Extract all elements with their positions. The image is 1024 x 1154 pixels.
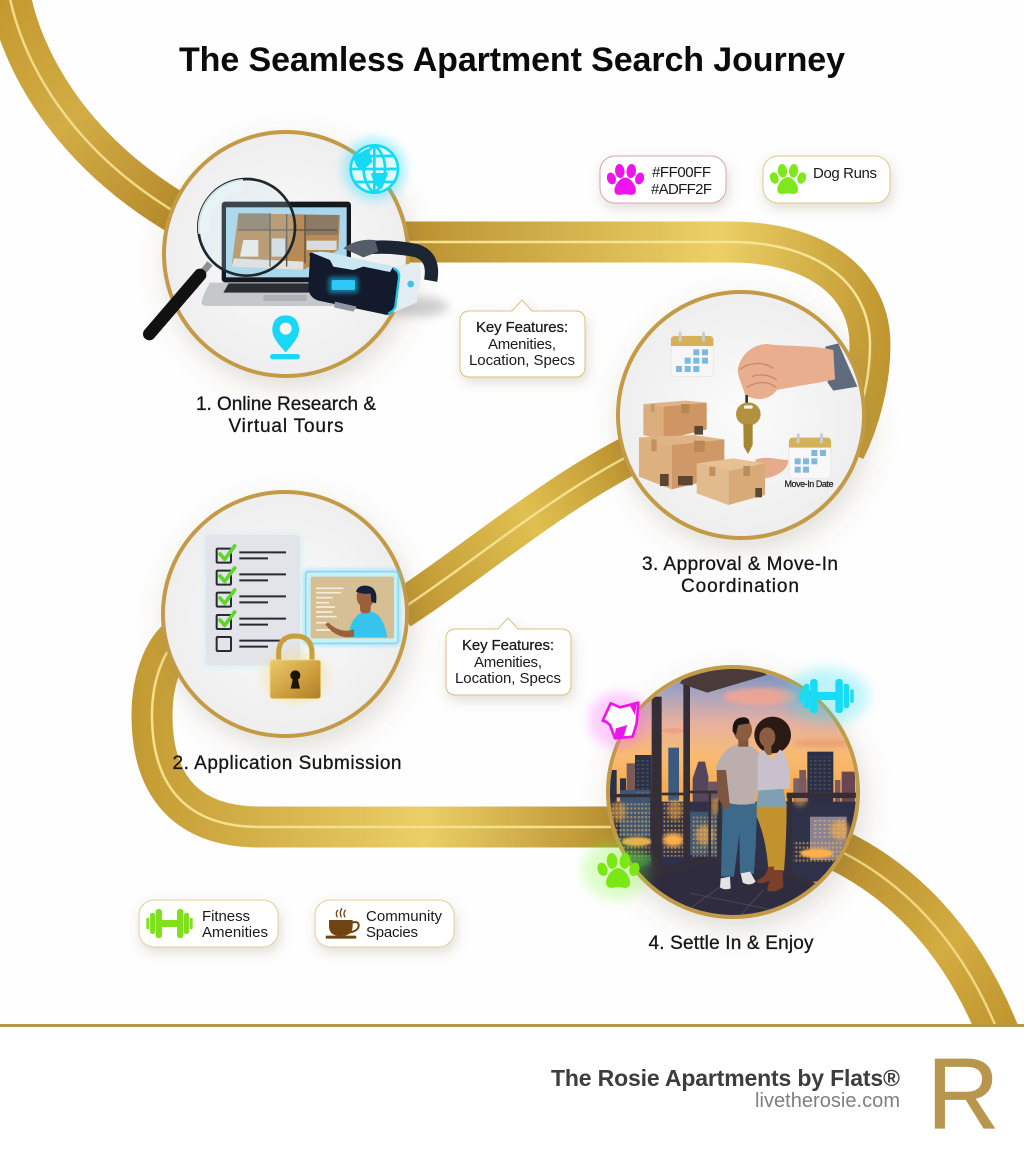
window frames and railing — [610, 683, 857, 886]
step 3 circle — [618, 292, 864, 538]
badge: magenta paw colour codes: #FF00FF — [652, 164, 711, 181]
icon: gold padlock — [262, 636, 329, 703]
callout: key features middle: Amenities, — [474, 654, 542, 671]
step 4 panel: settle in and enjoy — [582, 665, 869, 954]
logo: R mark: R — [927, 1038, 999, 1150]
step 4 label: 4. Settle In & Enjoy — [648, 933, 814, 954]
badge: fitness amenities — [139, 900, 278, 947]
step 3 label: 3. Approval & Move-In — [642, 554, 838, 575]
callout: key features middle: Key Features: — [462, 637, 554, 654]
step 1 illustration — [149, 137, 448, 359]
icon: glowing dog — [588, 692, 648, 748]
moving boxes — [639, 401, 788, 505]
ribbon segment: step 3 to step 2 — [400, 450, 640, 610]
application checklist — [203, 533, 303, 668]
callout: key features top — [460, 300, 585, 377]
badge: dog runs — [763, 156, 890, 203]
icon: move-in calendar — [789, 433, 831, 478]
step 1 circle — [164, 132, 408, 376]
step 2 panel: application submission — [163, 492, 407, 774]
callout: key features top: Key Features: — [476, 319, 568, 336]
couple — [716, 717, 791, 891]
callout: key features middle: Location, Specs — [455, 670, 561, 687]
step 4 photo: couple on balcony — [603, 665, 863, 927]
ribbon segment: step 2 to step 4 — [152, 632, 625, 827]
callout: key features middle — [446, 618, 571, 695]
step 2 illustration — [203, 533, 400, 703]
callout: key features top: Location, Specs — [469, 352, 575, 369]
footer brand name: The Rosie Apartments by Flats® — [551, 1065, 900, 1091]
step 3 label — [642, 554, 838, 597]
badge: dog runs: Dog Runs — [813, 165, 877, 182]
step 1 label: 1. Online Research & — [196, 394, 376, 415]
step 3 illustration — [639, 332, 857, 505]
laptop — [202, 202, 351, 306]
icon: globe — [343, 137, 406, 201]
footer — [0, 1024, 1024, 1154]
step 3 label: Coordination — [681, 576, 799, 597]
footer website: livetherosie.com — [755, 1090, 900, 1112]
icon: glowing dumbbell — [785, 668, 869, 724]
step 4 circle — [608, 667, 858, 917]
step 3 panel: approval and move-in — [618, 292, 864, 597]
balcony ceiling — [680, 669, 766, 693]
badge: magenta paw colour codes: #ADFF2F — [651, 181, 712, 198]
badge: fitness amenities: Fitness — [202, 908, 250, 925]
callout: key features top: Amenities, — [488, 336, 556, 353]
hand holding key — [736, 343, 857, 454]
move-in date caption: Move-In Date — [784, 479, 834, 489]
balcony floor — [640, 856, 816, 915]
icon: glowing paw — [582, 840, 650, 900]
title: The Seamless Apartment Search Journey — [179, 41, 845, 79]
city skyline — [610, 748, 855, 815]
badge: community spaces — [315, 900, 454, 947]
ribbon segment: step 4 to footer — [820, 842, 998, 1032]
ribbon segment: top left to step 1 — [8, 0, 180, 215]
icon: location pin — [270, 315, 300, 359]
magnifying glass — [149, 179, 295, 334]
icon: coffee cup — [326, 908, 359, 939]
step 2 label: 2. Application Submission — [172, 753, 402, 774]
step 2 circle — [163, 492, 407, 736]
step 1 panel: research and virtual tours — [149, 132, 448, 437]
VR headset — [308, 240, 448, 317]
badge: community spaces: Spacies — [366, 924, 418, 941]
icon: magenta paw — [605, 164, 646, 195]
icon: green dumbbell — [146, 909, 193, 938]
applicant ID card — [303, 569, 400, 646]
ribbon segment: step 1 to step 3 — [400, 242, 870, 450]
step 1 label: Virtual Tours — [228, 416, 344, 437]
step 1 label — [196, 394, 376, 437]
icon: calendar — [671, 332, 713, 377]
badge: magenta paw colour codes — [600, 156, 726, 203]
icon: green paw — [768, 164, 808, 194]
badge: community spaces: Community — [366, 908, 442, 925]
badge: fitness amenities: Amenities — [202, 924, 268, 941]
